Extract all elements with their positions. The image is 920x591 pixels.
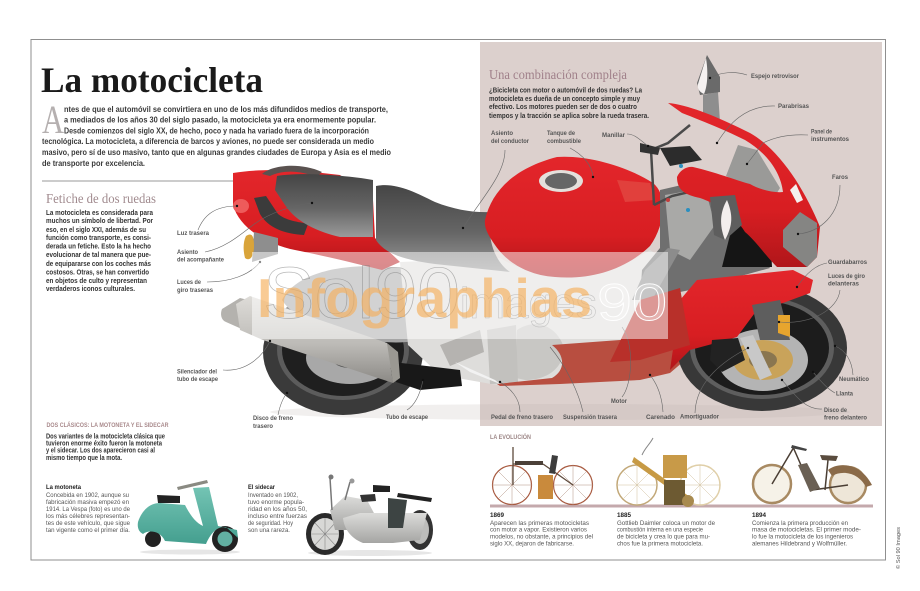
intro text block: tecnológica. La motocicleta, a diferencia de barcos y aviones, no puede ser considerada un medio [42,137,374,146]
text: el sidecar: de seguridad. Hoy [248,520,294,527]
panel heading and text: una combinación compleja: efectivo. Los motores pueden ser de dos o cuatro [489,104,637,111]
leader lines and part labels [177,73,869,430]
icon: 1869 steam motorcycle [492,447,593,505]
panel: dos clásicos: tuvieron enorme éxito fueron la motoneta [46,440,162,448]
brake pedal [455,362,500,384]
caption: 1869: 1869 [490,512,504,519]
fork and yellow turn signal [740,300,790,380]
caption: 1885: 1885 [617,512,631,519]
intro text block [42,97,391,168]
leader lines and part labels: Pedal de freno trasero [491,415,553,421]
panel heading and text: una combinación compleja: Una combinación compleja [489,67,627,82]
panel heading and text: una combinación compleja: tiempos y la tracción se aplica sobre la rueda trasera. [489,113,649,120]
ground shadow [270,404,850,420]
caption: 1894 [752,512,861,548]
front fork tube [632,248,680,300]
motorcycle illustration [221,55,850,420]
fuel tank [485,157,663,278]
tail light [233,199,249,213]
leader lines and part labels: Disco de freno [253,416,293,422]
caption: 1894: 1894 [752,512,766,519]
leader lines and part labels: Luz trasera [177,231,210,237]
leader lines and part labels: giro traseras [177,288,214,294]
icon: 1894 Hildebrand motorcycle [753,445,872,503]
leader lines and part labels: del conductor [491,139,530,145]
intro text block: A [42,97,64,142]
leader lines and part labels: Suspensión trasera [563,415,618,421]
text: la motoneta: tan vigente como el primer día. [46,527,130,534]
panel: fetiche de dos ruedas: derada un fetiche. Esto la ha hecho [46,244,151,251]
watermark: Sol90 [263,254,460,334]
leader lines and part labels: Manillar [602,133,626,139]
grab handle [254,196,308,235]
panel: fetiche de dos ruedas [46,191,156,293]
rear tail fairing [233,170,400,270]
caption: 1894: lo fue la motocicleta de los ingenieros [752,534,853,541]
leader lines and part labels: Silenciador del [177,370,217,376]
belly fairing [497,335,697,386]
panel heading and text: una combinación compleja [489,67,649,120]
frame plate [487,325,518,384]
caption: 1869: con motor a vapor. Existieron varios [490,526,587,534]
text: el sidecar: ridad en los años 50, [248,506,307,513]
rear view mirror [697,55,720,122]
watermark: Infographias [257,267,592,329]
leader lines and part labels: Panel de [811,130,833,136]
timeline bar [490,504,873,508]
text: la motoneta: 1914. La Vespa (foto) es uno de [46,506,130,513]
lower fairing [670,270,813,370]
leader lines and part labels: freno delantero [824,416,867,422]
instrument panel [726,145,780,196]
text: la motoneta: La motoneta [46,484,81,491]
panel: fetiche de dos ruedas: Fetiche de dos ruedas [46,191,156,206]
panel: fetiche de dos ruedas: La motocicleta es considerada para [46,210,153,217]
leader lines and part labels: Disco de [824,408,848,414]
leader lines and part labels: Neumático [839,377,869,383]
watermark: images [460,279,597,328]
text: el sidecar: Inventado en 1902, [248,492,298,499]
text: la motoneta: los más célebres representan- [46,513,130,520]
icon: vespa scooter [138,480,240,554]
caption: 1885: combustión interna en una especie [617,526,703,534]
brake caliper [710,338,745,372]
front wheel [677,285,847,411]
panel: una combinación compleja background [480,42,882,426]
heading: la evolución: LA EVOLUCIÓN [490,433,531,441]
panel: fetiche de dos ruedas: verdaderos iconos culturales. [46,286,135,293]
leader lines and part labels: Parabrisas [778,104,810,110]
leader lines and part labels: del acompañante [177,258,225,264]
caption: 1885: Gottlieb Daimler coloca un motor de [617,520,715,527]
caption: 1894: masa de motocicletas. El primer mode- [752,526,861,534]
intro text block: de transporte por excelencia. [42,159,145,168]
title: La motocicleta [41,60,263,100]
leader lines and part labels: Luces de [177,280,202,286]
intro text block: masivo, pero sí de uso masivo, tanto que en algunas grandes ciudades de Europa y Asia es el medio [42,148,391,157]
caption: 1894: alemanes Hildebrand y Wolfmüller. [752,541,847,548]
leader lines and part labels: Luces de giro [828,274,865,280]
headlight [783,212,817,267]
leader lines and part labels: trasero [253,424,273,430]
text: la motoneta: fabricación masiva empezó en [46,499,129,506]
rider seat [376,185,510,272]
panel: fetiche de dos ruedas: costosos. Otras, se han convertido [46,269,149,276]
leader lines and part labels: Carenado [646,415,675,421]
footplate [440,330,484,366]
caption: 1885: chos fue la primera motocicleta. [617,541,703,548]
leader lines and part labels: delanteras [828,282,860,288]
watermark [252,252,668,339]
panel heading and text: una combinación compleja: motocicleta es dueña de un concepto simple y muy [489,96,640,103]
leader lines and part labels: Asiento [491,131,513,137]
panel: fetiche de dos ruedas: muchos un símbolo de libertad. Por [46,218,153,225]
text: el sidecar: son una rareza. [248,527,290,534]
caption: 1869: modelos, no obstante, a principios del [490,534,593,541]
panel: dos clásicos: y el sidecar. Los dos aparecieron casi al [46,448,155,455]
engine block [400,250,668,385]
text: el sidecar: El sidecar [248,484,275,491]
leader lines and part labels: Espejo retrovisor [751,74,800,80]
text: el sidecar: incluso entre fuerzas [248,513,307,520]
front frame and controls [640,125,772,300]
passenger seat [275,174,373,237]
leader lines and part labels: Amortiguador [680,414,720,420]
engine cover [516,324,563,380]
leader lines and part labels: Tanque de [547,131,576,137]
text: la motoneta [46,484,130,534]
panel: dos clásicos [46,422,169,462]
rear wheel [263,289,423,415]
panel: dos clásicos: mismo tiempo que la mota. [46,455,122,462]
caption: 1869 [490,512,593,548]
icon: 1885 Daimler motorcycle [617,438,720,507]
caption: 1885 [617,512,715,548]
intro text block: ntes de que el automóvil se convirtiera en uno de los más difundidos medios de transporte, [64,105,388,114]
text: la motoneta: tes de este vehículo, que sigue [46,520,130,527]
panel: fetiche de dos ruedas: en objetos de culto y representan [46,278,147,285]
panel: fetiche de dos ruedas: de equipararse con los coches más [46,261,151,268]
leader lines and part labels: tubo de escape [177,377,219,383]
windshield and upper fairing [668,103,820,267]
watermark: 90 [597,274,667,332]
exhaust pipe [393,362,462,390]
leader lines and part labels: Faros [832,175,849,181]
leader lines and part labels: combustible [547,139,582,145]
text: el sidecar: tuvo enorme popula- [248,499,304,506]
panel: fetiche de dos ruedas: eso, en el siglo XXI, además de su [46,227,146,234]
panel: fetiche de dos ruedas: función como transporte, es consi- [46,235,152,242]
silencer [221,296,400,383]
caption: 1894: Comienza la primera producción en [752,520,848,527]
leader lines and part labels: Tubo de escape [386,415,429,421]
caption: 1885: de bicicleta y crea lo que para mu- [617,534,710,541]
leader lines and part labels: Llanta [836,392,854,398]
text: el sidecar [248,484,307,534]
panel heading and text: una combinación compleja: ¿Bicicleta con motor o automóvil de dos ruedas? La [489,88,642,94]
leader lines and part labels: Guardabarros [828,260,868,266]
panel: dos clásicos: Dos variantes de la motocicleta clásica que [46,433,165,440]
leader lines and part labels: Asiento [177,250,198,256]
leader lines and part labels: instrumentos [811,137,850,143]
intro text block: a mediados de los años 30 del siglo pasado, la motocicleta ya era enormemente popular. [64,116,376,124]
rear fender and swingarm [282,266,434,342]
credit: © Sol 90 Images [895,527,902,569]
text: la motoneta: Concebida en 1902, aunque su [46,492,129,499]
icon: sidecar motorcycle [306,474,433,556]
leader lines and part labels: Motor [611,399,628,405]
intro text block: Desde comienzos del siglo XX, de hecho, poco y nada ha variado fuera de la incorporación [64,126,369,135]
panel: dos clásicos: DOS CLÁSICOS: LA MOTONETA Y EL SIDECAR [46,422,169,429]
panel: fetiche de dos ruedas: evolucionar de tal manera que pue- [46,252,152,259]
caption: 1869: Aparecen las primeras motocicletas [490,520,589,527]
caption: 1869: siglo XX, dejaron de fabricarse. [490,541,574,548]
rear turn signal [244,232,278,262]
left mirror front [710,195,742,240]
